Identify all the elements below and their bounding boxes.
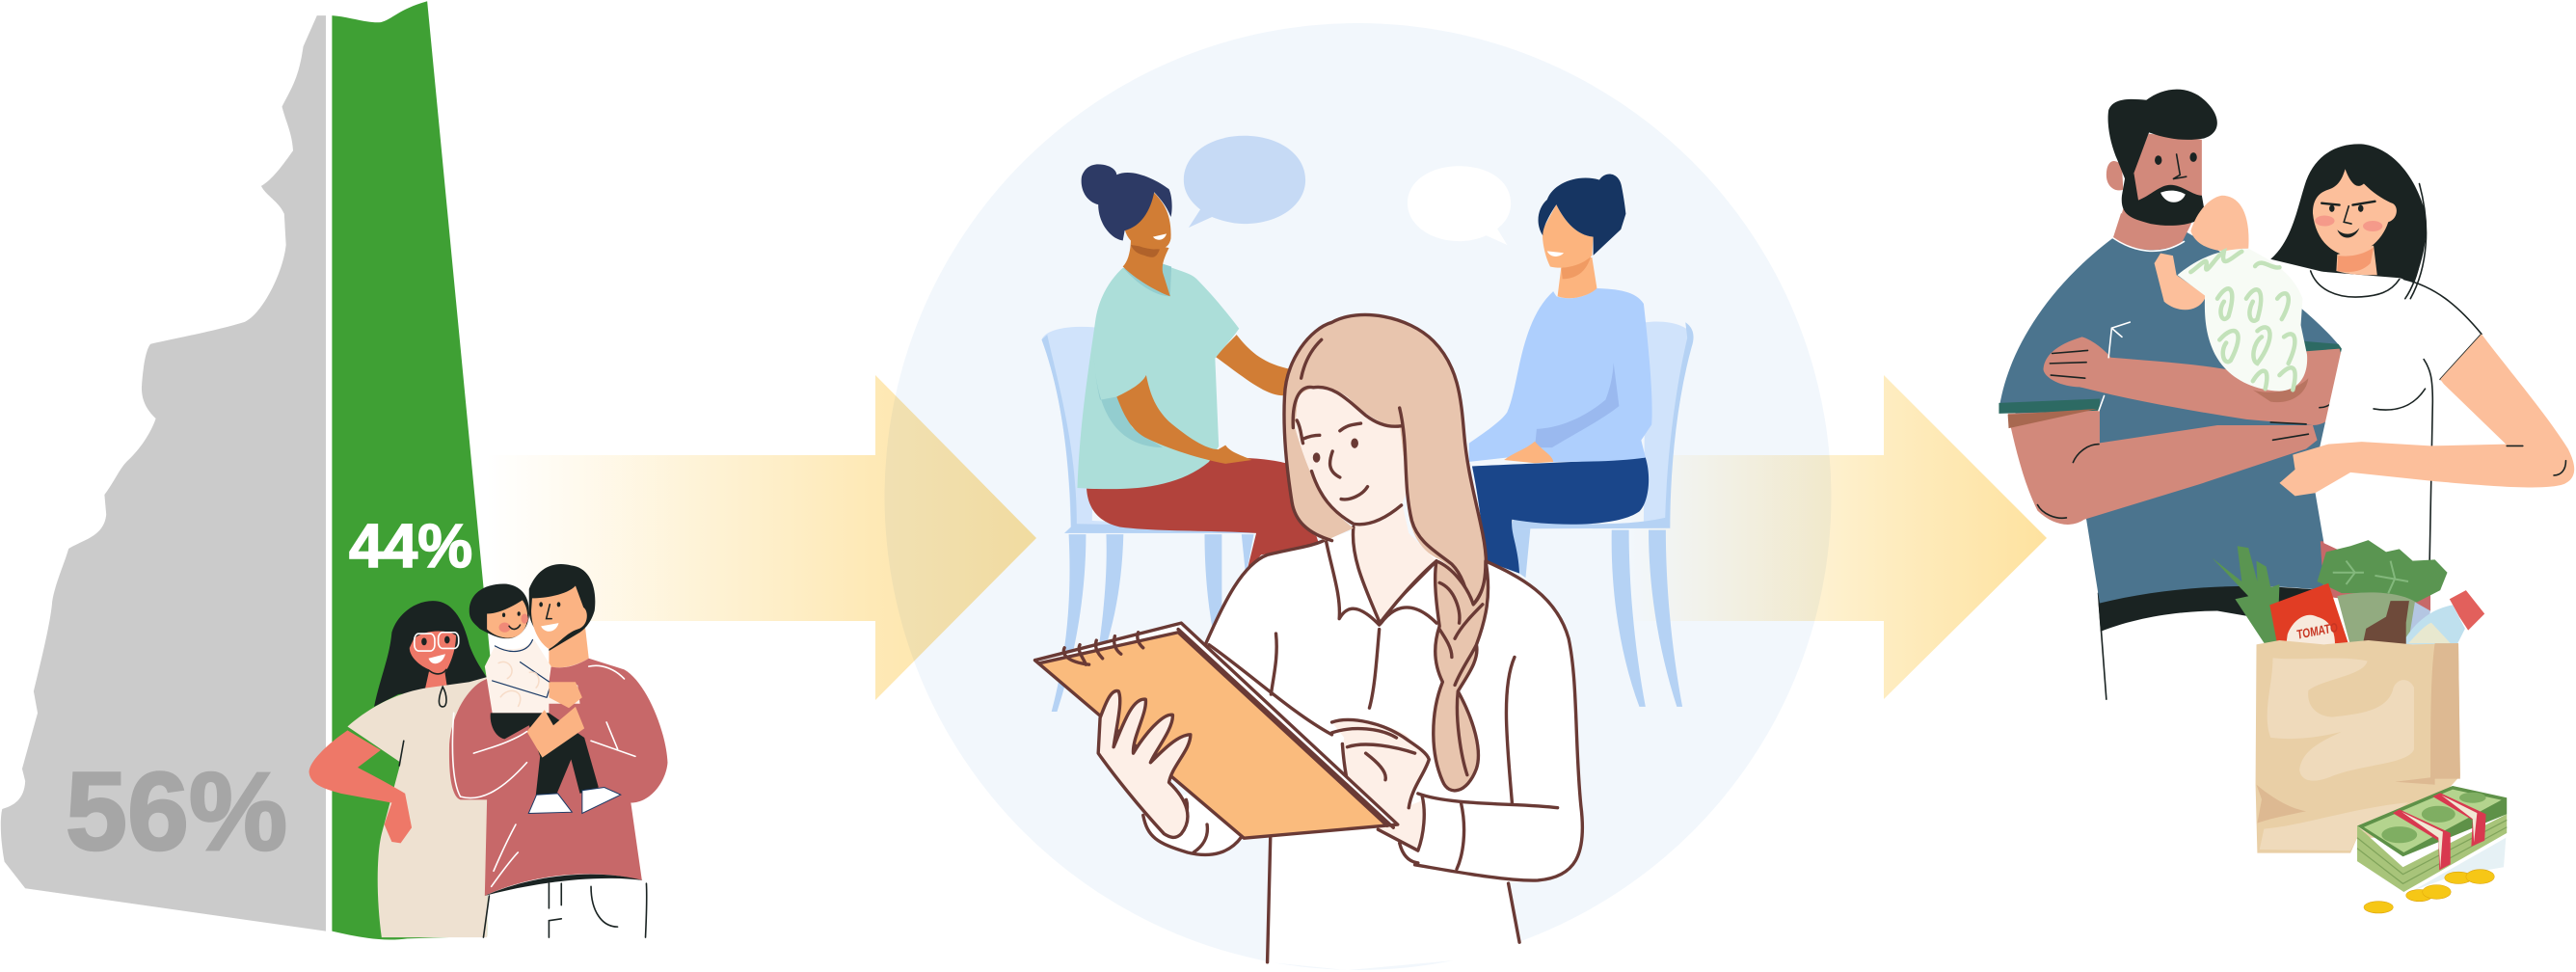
panel: state map and family (1, 1, 667, 940)
man arm lines (2037, 350, 2337, 518)
stack layers (2357, 820, 2507, 883)
man neck (2113, 213, 2190, 250)
arm sleeve shadow (2008, 409, 2098, 428)
hair (1539, 174, 1625, 256)
baby arm (2155, 254, 2206, 310)
neck shadow (1561, 255, 1592, 279)
man eyes and smile (2113, 152, 2197, 251)
face (2313, 169, 2397, 256)
tomato box (2269, 583, 2348, 644)
left seated woman (1077, 164, 1320, 570)
groceries (2212, 540, 2484, 853)
child shirt (485, 638, 580, 713)
panel: counselling illustration (1034, 136, 1694, 970)
man neck (549, 620, 589, 667)
man (1999, 90, 2348, 699)
woman face and neck (410, 631, 456, 689)
neck (1558, 257, 1597, 298)
blue wrapper (2408, 602, 2430, 643)
cash stack (2357, 786, 2507, 913)
man upper arm (2008, 411, 2318, 525)
child features (499, 611, 528, 633)
man shirt detail (2099, 322, 2130, 411)
paper bag (2256, 640, 2460, 853)
sweater shade (1535, 363, 1619, 447)
hair (2270, 144, 2426, 296)
arm creases (2507, 446, 2565, 475)
tomato text: TOMATO (2296, 620, 2339, 642)
child hand (549, 682, 582, 708)
far arm (1215, 335, 1289, 395)
child shoes (528, 787, 621, 813)
right chair (1511, 321, 1694, 707)
child shirt lines (493, 639, 551, 697)
baby (2155, 196, 2307, 392)
child trousers (491, 713, 599, 796)
spiral rings (1063, 633, 1143, 664)
brown jar (2363, 601, 2409, 644)
woman hair (374, 601, 489, 707)
neck outline (1353, 526, 1436, 623)
neck (2336, 246, 2377, 275)
shirt lines (2311, 271, 2482, 564)
man head (529, 564, 595, 651)
man sweater (449, 659, 667, 896)
collar (1326, 539, 1436, 625)
map: green 44 percent share (332, 1, 492, 940)
arrow: left to centre (487, 375, 1036, 700)
near arm (1116, 375, 1252, 464)
face (1125, 192, 1171, 249)
bag creases (2257, 777, 2435, 823)
sweater highlights (452, 665, 635, 886)
right hand (1332, 719, 1431, 852)
top note light (2364, 790, 2502, 852)
stack side (2357, 814, 2507, 892)
left hand outline (1098, 690, 1191, 837)
neck (1353, 505, 1436, 623)
clipboard outline (1034, 623, 1398, 838)
hair (1285, 314, 1486, 605)
shirt (2291, 271, 2482, 593)
child shirt pattern (498, 662, 539, 707)
sweater hand (1504, 442, 1553, 463)
man hem (2099, 586, 2323, 632)
man ear (2106, 161, 2123, 190)
note ovals (2381, 793, 2486, 843)
man hair (2108, 90, 2217, 179)
man features (539, 602, 560, 632)
green onions (2212, 546, 2279, 646)
clipboard back (1034, 623, 1398, 838)
background circle (885, 23, 1832, 970)
neck shadow (2337, 248, 2374, 272)
speech bubble: blue (1184, 136, 1305, 228)
top shade (1093, 263, 1171, 447)
eyes (1313, 439, 1358, 463)
face (1295, 388, 1408, 523)
neck shadow (1131, 245, 1160, 257)
baby head (2190, 196, 2249, 252)
hair (1082, 164, 1172, 240)
features (2315, 184, 2427, 299)
woman (2270, 144, 2574, 611)
smile (1153, 233, 1167, 240)
neck (1123, 239, 1170, 296)
man sleeve trim (1999, 341, 2345, 414)
man head (2122, 134, 2202, 225)
face (1543, 204, 1594, 268)
woman dress (347, 676, 492, 937)
bag side fold (2430, 643, 2460, 779)
bands (2393, 793, 2486, 870)
braid (1434, 561, 1489, 791)
trousers (1472, 457, 1649, 574)
man back arm (2043, 337, 2348, 425)
woman with clipboard (1034, 314, 1582, 970)
stack top (2357, 786, 2507, 856)
top (1077, 266, 1239, 489)
romper pattern (2190, 252, 2295, 390)
coins (2364, 870, 2494, 913)
man hem (485, 875, 643, 896)
speech bubble: white (1408, 166, 1511, 245)
clipboard cover (1038, 633, 1387, 838)
shadow (2413, 838, 2506, 891)
sweater (1469, 288, 1652, 462)
arrow: centre to right (1629, 375, 2047, 699)
left chair (1041, 327, 1254, 712)
44 percent label: 44% (349, 511, 472, 580)
skirt (2321, 537, 2430, 611)
smile (1547, 251, 1564, 256)
left hand (1098, 690, 1191, 837)
child head (470, 583, 529, 638)
braid outline (1434, 561, 1489, 791)
band white (2402, 796, 2477, 869)
illustration: family of three (309, 564, 667, 937)
shirt outline (1206, 539, 1582, 962)
man t-shirt (1999, 232, 2344, 604)
man trousers (483, 883, 647, 937)
trousers (1087, 458, 1320, 570)
leafy greens (2318, 540, 2448, 602)
arm (2279, 334, 2574, 496)
man hand (526, 707, 584, 758)
56 percent label: 56% (66, 750, 287, 874)
cuff left (1143, 794, 1242, 854)
woman glasses and smile (399, 633, 459, 766)
child face (487, 600, 527, 638)
map: grey 56 percent share (1, 15, 326, 932)
right seated woman (1469, 174, 1652, 574)
lettuce bag (2337, 592, 2430, 646)
hair and face outline (1284, 314, 1487, 605)
cuff left outline (1143, 799, 1242, 854)
right hand outline (1332, 720, 1429, 863)
panel: family with groceries and money (1999, 90, 2574, 913)
bottle cap (2450, 590, 2484, 631)
shirt (1206, 530, 1582, 970)
man face (531, 586, 587, 649)
bag highlights (2260, 658, 2414, 850)
woman arm (309, 730, 412, 843)
man trousers lines (2099, 593, 2106, 699)
arm shading (2253, 378, 2308, 402)
tomato label (2286, 615, 2335, 644)
leaf veins (2333, 561, 2408, 593)
man beard (2122, 174, 2205, 226)
blue bottle (2406, 605, 2465, 644)
bottle label (2408, 623, 2451, 643)
baby romper (2178, 249, 2307, 392)
